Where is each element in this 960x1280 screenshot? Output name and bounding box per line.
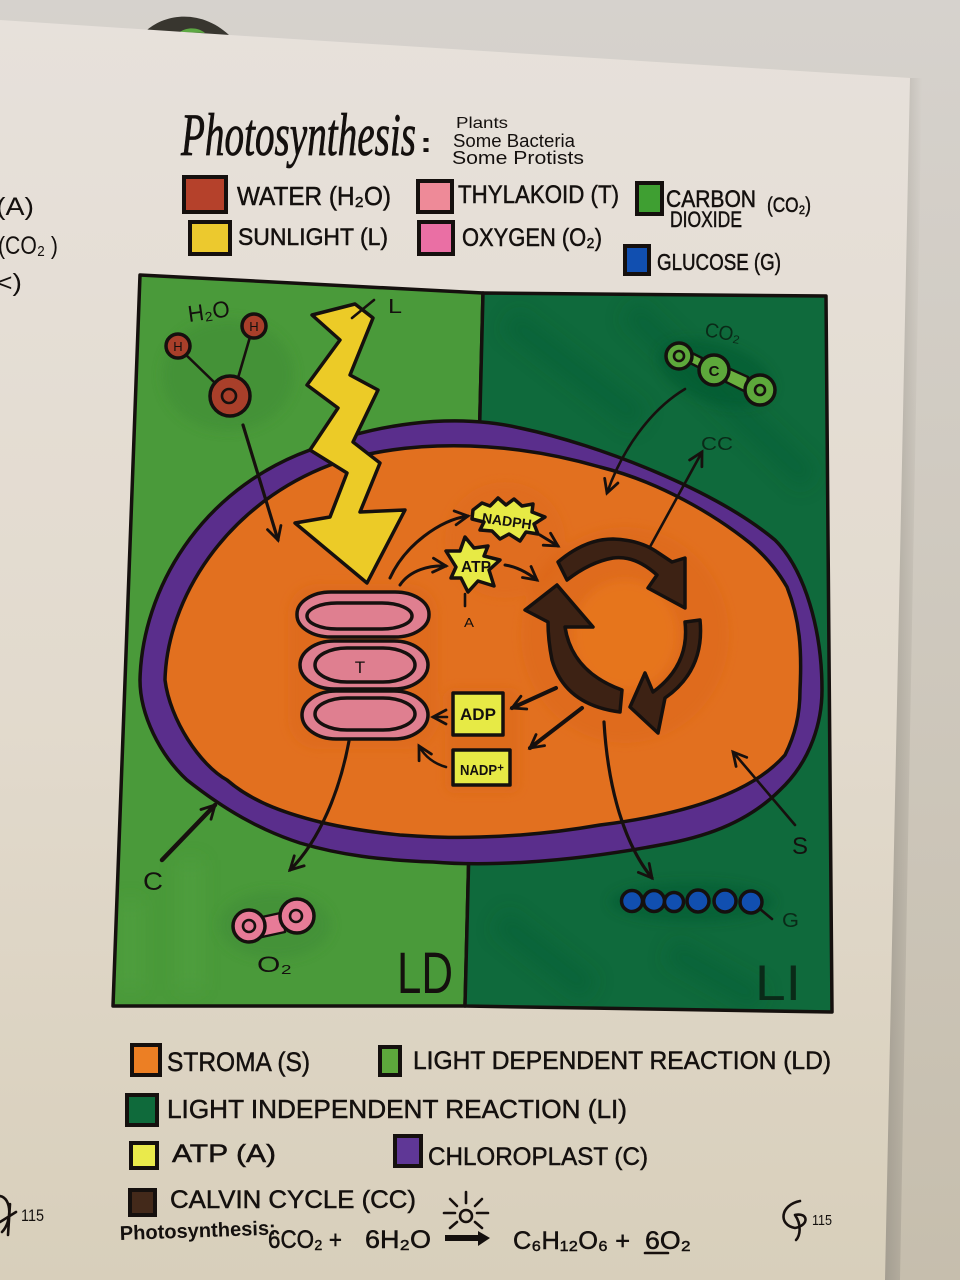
legend: bottom: STROMA (S) bbox=[167, 1047, 310, 1077]
arrow: ATP to cycle bbox=[505, 565, 537, 580]
legend: bottom: ATP (A) bbox=[172, 1140, 276, 1168]
equation: Photosynthesis: bbox=[119, 1218, 276, 1245]
arrow: water into stroma bbox=[243, 425, 278, 540]
legend: bottom: LIGHT INDEPENDENT REACTION (LI) bbox=[167, 1094, 627, 1124]
arrow: carbon dioxide into stroma bbox=[607, 389, 685, 493]
carbon dioxide molecule: C bbox=[709, 363, 720, 380]
NADP+ box bbox=[453, 750, 510, 785]
ADP box bbox=[453, 693, 503, 735]
label: LD: LD bbox=[397, 941, 453, 1006]
water molecule: H bbox=[249, 319, 259, 334]
legend: bottom: LIGHT DEPENDENT REACTION (LD) bbox=[413, 1047, 831, 1075]
signature bbox=[784, 1201, 832, 1240]
chloroplast membrane bbox=[140, 421, 822, 864]
legend: top: (CO₂) bbox=[767, 194, 811, 217]
oxygen molecule bbox=[233, 899, 314, 977]
legend: top: OXYGEN (O₂) bbox=[462, 224, 602, 252]
arrow: calvin cycle label bbox=[645, 434, 733, 556]
arrow: calvin cycle label: CC bbox=[701, 434, 733, 454]
arrow: thylakoid to oxygen bbox=[290, 741, 349, 870]
legend: bottom: CALVIN CYCLE (CC) bbox=[170, 1186, 416, 1214]
equation: 6H₂O bbox=[365, 1226, 431, 1254]
ADP box: ADP bbox=[460, 705, 496, 724]
legend: top: SUNLIGHT (L) bbox=[238, 224, 388, 251]
legend: top: GLUCOSE (G) bbox=[657, 249, 781, 275]
cropped signature at left edge bbox=[0, 1196, 44, 1235]
arrows: ADP and NADP back to thylakoid bbox=[419, 688, 582, 767]
oxygen molecule: O₂ bbox=[257, 952, 292, 977]
arrow: NADPH to cycle bbox=[540, 535, 558, 546]
sunlight bolt: L bbox=[388, 296, 402, 318]
legend: top: WATER (H₂O) bbox=[237, 181, 391, 211]
legend: top bbox=[184, 177, 811, 275]
glucose chain bbox=[622, 890, 799, 932]
text: organisms list bbox=[452, 115, 584, 168]
equation: 6O₂ bbox=[645, 1227, 691, 1255]
glucose chain: G bbox=[782, 910, 799, 932]
legend: bottom: CHLOROPLAST (C) bbox=[428, 1143, 648, 1171]
water molecule bbox=[166, 295, 266, 416]
icon: drawing peeking out from under sheet bbox=[147, 17, 232, 38]
ATP burst bbox=[446, 537, 500, 630]
NADPH burst bbox=[472, 498, 545, 541]
legend: top: CARBON bbox=[666, 186, 756, 213]
equation: C₆H₁₂O₆ + bbox=[513, 1227, 630, 1255]
water molecule: H bbox=[173, 339, 183, 354]
sunlight bolt bbox=[295, 296, 405, 583]
label: LI: LI bbox=[755, 955, 801, 1011]
legend: bottom bbox=[127, 1045, 831, 1215]
icon: sun over reaction arrow bbox=[444, 1192, 490, 1246]
calvin cycle arrows bbox=[525, 539, 701, 733]
arrow: thylakoid to NADPH bbox=[390, 516, 468, 578]
title: Photosynthesis bbox=[180, 102, 416, 168]
panel: light dependent reaction bbox=[113, 275, 483, 1006]
NADP+ box: NADP⁺ bbox=[460, 762, 504, 779]
legend: top: DIOXIDE bbox=[670, 207, 742, 232]
arrow: thylakoid to ATP bbox=[400, 566, 446, 585]
text: organisms list: Some Bacteria bbox=[453, 131, 576, 151]
arrow: cycle to glucose bbox=[604, 722, 652, 878]
signature: 115 bbox=[812, 1212, 832, 1229]
ATP burst: ATP bbox=[461, 559, 491, 576]
carbon dioxide molecule bbox=[666, 319, 775, 405]
arrow: S label to stroma: S bbox=[792, 833, 808, 860]
text: organisms list: Some Protists bbox=[452, 148, 584, 168]
NADPH burst: NADPH bbox=[481, 510, 533, 532]
title: : bbox=[420, 127, 432, 158]
equation: 6CO₂ + bbox=[268, 1226, 342, 1254]
carbon dioxide molecule: CO₂ bbox=[703, 319, 742, 347]
legend: top: THYLAKOID (T) bbox=[458, 181, 619, 209]
equation bbox=[119, 1218, 691, 1255]
stroma bbox=[165, 446, 801, 837]
thylakoid stack: T bbox=[355, 658, 365, 677]
cropped signature at left edge: 115 bbox=[21, 1206, 44, 1225]
arrow: C label to chloroplast bbox=[143, 805, 215, 896]
title bbox=[180, 102, 432, 168]
text: organisms list: Plants bbox=[456, 115, 508, 132]
thylakoid stack bbox=[297, 592, 429, 739]
cropped notes at left edge bbox=[0, 193, 58, 297]
arrow: S label to stroma bbox=[733, 752, 808, 860]
ATP burst: A bbox=[464, 615, 474, 630]
water molecule: H₂O bbox=[186, 295, 231, 327]
arrow: C label to chloroplast: C bbox=[143, 868, 163, 896]
cropped notes at left edge: (CO₂ ) bbox=[0, 232, 58, 260]
panel: light independent reaction bbox=[465, 293, 832, 1012]
